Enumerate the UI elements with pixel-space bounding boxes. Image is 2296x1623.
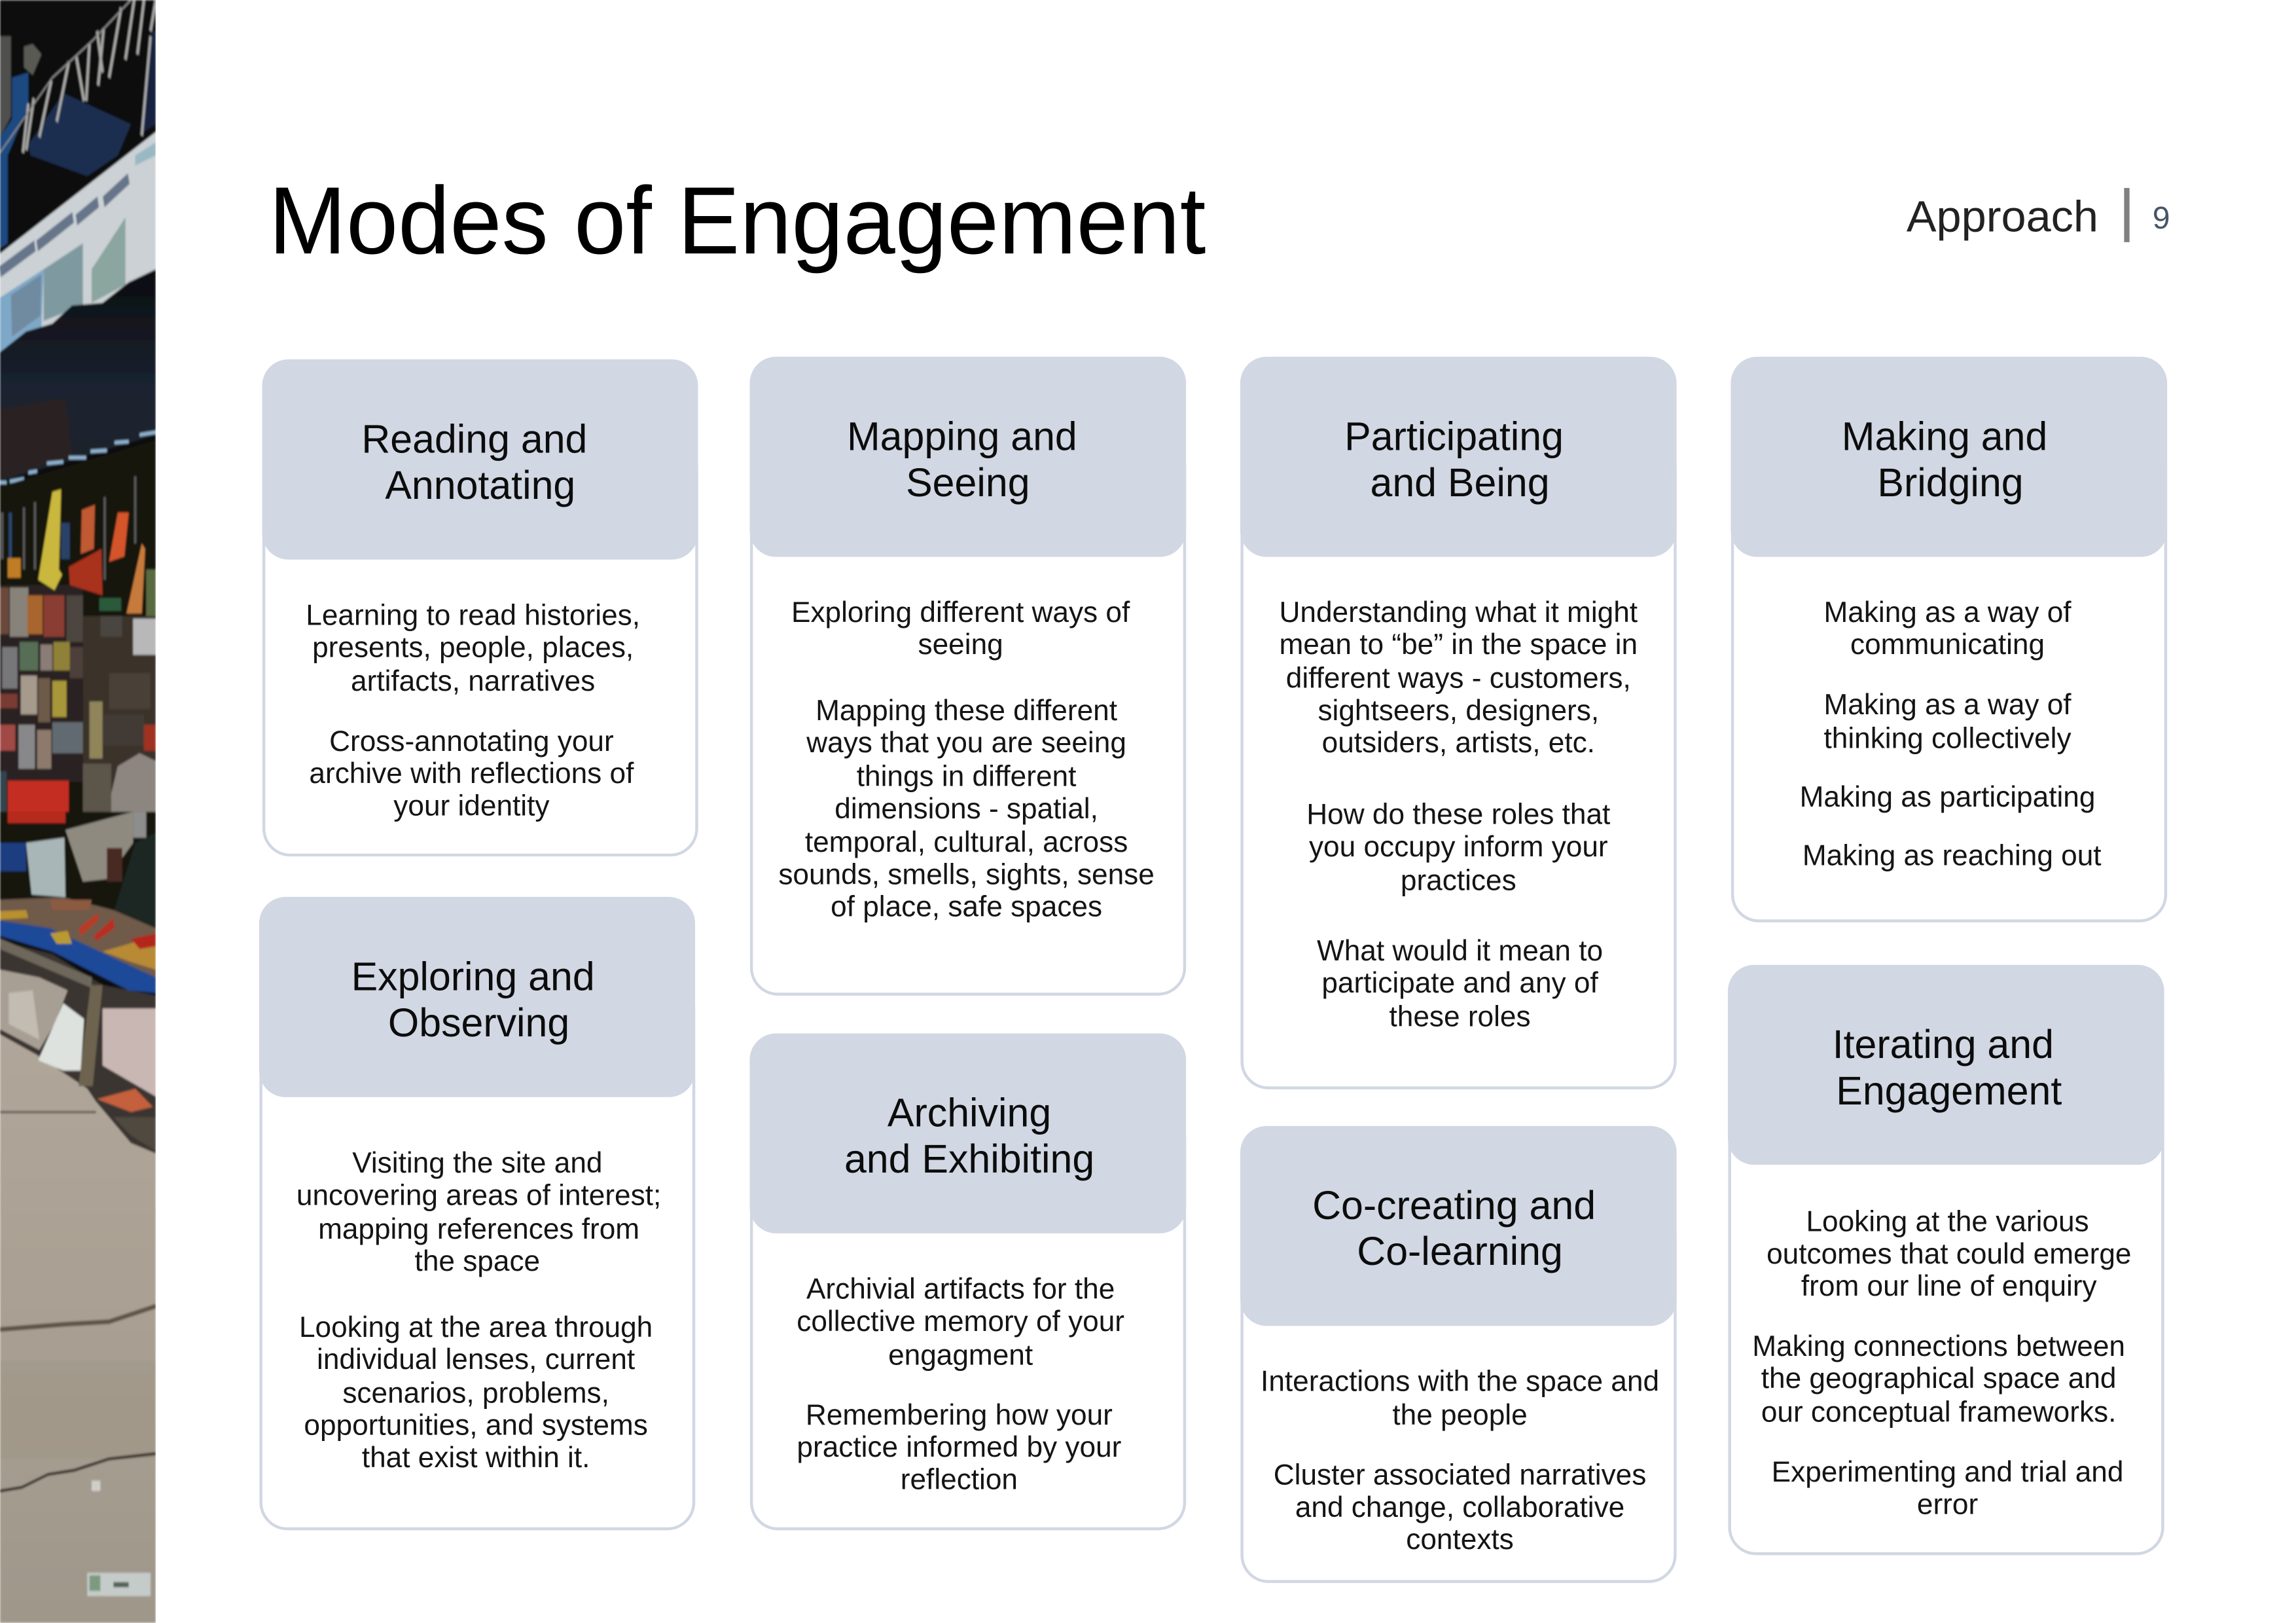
card text: Making as reaching out: [1803, 839, 2102, 871]
card header: [1731, 357, 2167, 557]
card text: Making connections between: [1752, 1330, 2125, 1362]
card text: that exist within it.: [362, 1442, 590, 1474]
title: Modes of Engagement: [269, 167, 1206, 274]
card text: artifacts, narratives: [351, 665, 595, 697]
card body: [1242, 439, 1675, 1088]
card header: [749, 1033, 1186, 1233]
card text: outcomes that could emerge: [1767, 1238, 2131, 1270]
card text: these roles: [1389, 1000, 1531, 1032]
card text: ways that you are seeing: [806, 727, 1126, 759]
card body: [1730, 1048, 2162, 1554]
card body: [751, 1113, 1185, 1529]
card text: communicating: [1850, 629, 2045, 661]
card title: Iterating and: [1833, 1022, 2054, 1067]
card text: collective memory of your: [797, 1305, 1124, 1338]
card text: Learning to read histories,: [306, 599, 640, 631]
card text: the geographical space and: [1761, 1362, 2116, 1395]
section label: Approach: Approach: [1907, 192, 2098, 242]
card header: [262, 359, 698, 560]
card title: Exploring and: [351, 954, 595, 998]
card body: [261, 981, 694, 1529]
card text: seeing: [918, 629, 1003, 661]
card: Reading and Annotating: [262, 359, 698, 855]
card: Exploring and Observing: [259, 897, 695, 1529]
card header: [1240, 1126, 1677, 1326]
card: Archiving and Exhibiting: [749, 1033, 1186, 1529]
card text: reflection: [901, 1463, 1018, 1495]
card header: [1728, 965, 2164, 1165]
card title: Co-creating and: [1312, 1183, 1596, 1228]
card: Co-creating and Co-learning: [1240, 1126, 1677, 1582]
card text: engagment: [888, 1339, 1033, 1371]
card text: of place, safe spaces: [831, 891, 1102, 923]
card title: and Exhibiting: [844, 1137, 1094, 1181]
card text: How do these roles that: [1306, 799, 1610, 831]
card text: scenarios, problems,: [342, 1377, 609, 1409]
card text: mapping references from: [318, 1213, 639, 1245]
card text: Interactions with the space and: [1261, 1366, 1659, 1398]
card text: Looking at the area through: [299, 1311, 653, 1343]
card text: Experimenting and trial and: [1772, 1456, 2123, 1488]
card header: [749, 357, 1186, 557]
card text: and change, collaborative: [1295, 1491, 1624, 1523]
card header: [1240, 357, 1677, 557]
card text: outsiders, artists, etc.: [1322, 727, 1595, 759]
card: Mapping and Seeing: [749, 357, 1186, 994]
card text: sightseers, designers,: [1318, 695, 1599, 727]
card text: the people: [1392, 1399, 1528, 1431]
card title: Bridging: [1877, 460, 2024, 505]
card text: practices: [1401, 864, 1516, 896]
card text: opportunities, and systems: [304, 1410, 648, 1442]
card text: archive with reflections of: [309, 757, 634, 790]
card text: temporal, cultural, across: [805, 826, 1128, 858]
card text: Understanding what it might: [1280, 596, 1638, 629]
card text: different ways - customers,: [1286, 663, 1631, 695]
card body: [1242, 1209, 1675, 1582]
card text: Making as a way of: [1823, 689, 2072, 721]
card body: [751, 439, 1185, 994]
card text: Archivial artifacts for the: [806, 1273, 1115, 1305]
card title: Reading and: [361, 416, 587, 461]
card text: thinking collectively: [1823, 722, 2072, 754]
card text: Making as participating: [1800, 781, 2095, 813]
card: Participating and Being: [1240, 357, 1677, 1088]
card title: Observing: [388, 1000, 569, 1045]
card title: Archiving: [888, 1091, 1051, 1135]
card text: from our line of enquiry: [1801, 1270, 2097, 1302]
card text: you occupy inform your: [1309, 831, 1608, 863]
card text: participate and any of: [1321, 967, 1598, 999]
card text: Remembering how your: [806, 1399, 1113, 1431]
card header: [259, 897, 695, 1097]
card title: Participating: [1344, 414, 1564, 458]
card text: What would it mean to: [1317, 935, 1603, 967]
card text: Cluster associated narratives: [1274, 1459, 1646, 1491]
page divider: [2124, 188, 2130, 242]
card text: uncovering areas of interest;: [296, 1179, 661, 1211]
card text: practice informed by your: [797, 1431, 1121, 1463]
card text: Making as a way of: [1823, 596, 2072, 629]
card text: individual lenses, current: [317, 1343, 635, 1376]
card title: Annotating: [385, 463, 575, 507]
card text: your identity: [393, 790, 549, 822]
card text: Exploring different ways of: [791, 596, 1130, 629]
card title: Mapping and: [847, 414, 1077, 458]
page number: 9: [2153, 200, 2170, 236]
card text: mean to “be” in the space in: [1280, 629, 1638, 661]
card text: Mapping these different: [816, 695, 1117, 727]
card text: error: [1917, 1488, 1978, 1520]
card title: Co-learning: [1357, 1229, 1563, 1273]
card title: and Being: [1371, 460, 1550, 505]
card text: Looking at the various: [1806, 1206, 2089, 1238]
card text: sounds, smells, sights, sense: [778, 858, 1155, 890]
card: Iterating and Engagement: [1728, 965, 2164, 1554]
card body: [1732, 439, 2166, 921]
card text: presents, people, places,: [312, 632, 634, 664]
photo: market stall and pavement: [0, 0, 156, 1623]
card title: Seeing: [906, 460, 1030, 505]
card text: contexts: [1406, 1523, 1514, 1556]
card: Making and Bridging: [1731, 357, 2167, 921]
card body: [264, 439, 696, 855]
card title: Engagement: [1836, 1068, 2062, 1113]
card title: Making and: [1842, 414, 2047, 458]
card text: Visiting the site and: [352, 1147, 602, 1179]
card text: our conceptual frameworks.: [1761, 1396, 2116, 1429]
card text: things in different: [857, 761, 1076, 793]
card text: dimensions - spatial,: [834, 793, 1098, 825]
card text: the space: [415, 1245, 540, 1277]
card text: Cross-annotating your: [329, 725, 614, 757]
